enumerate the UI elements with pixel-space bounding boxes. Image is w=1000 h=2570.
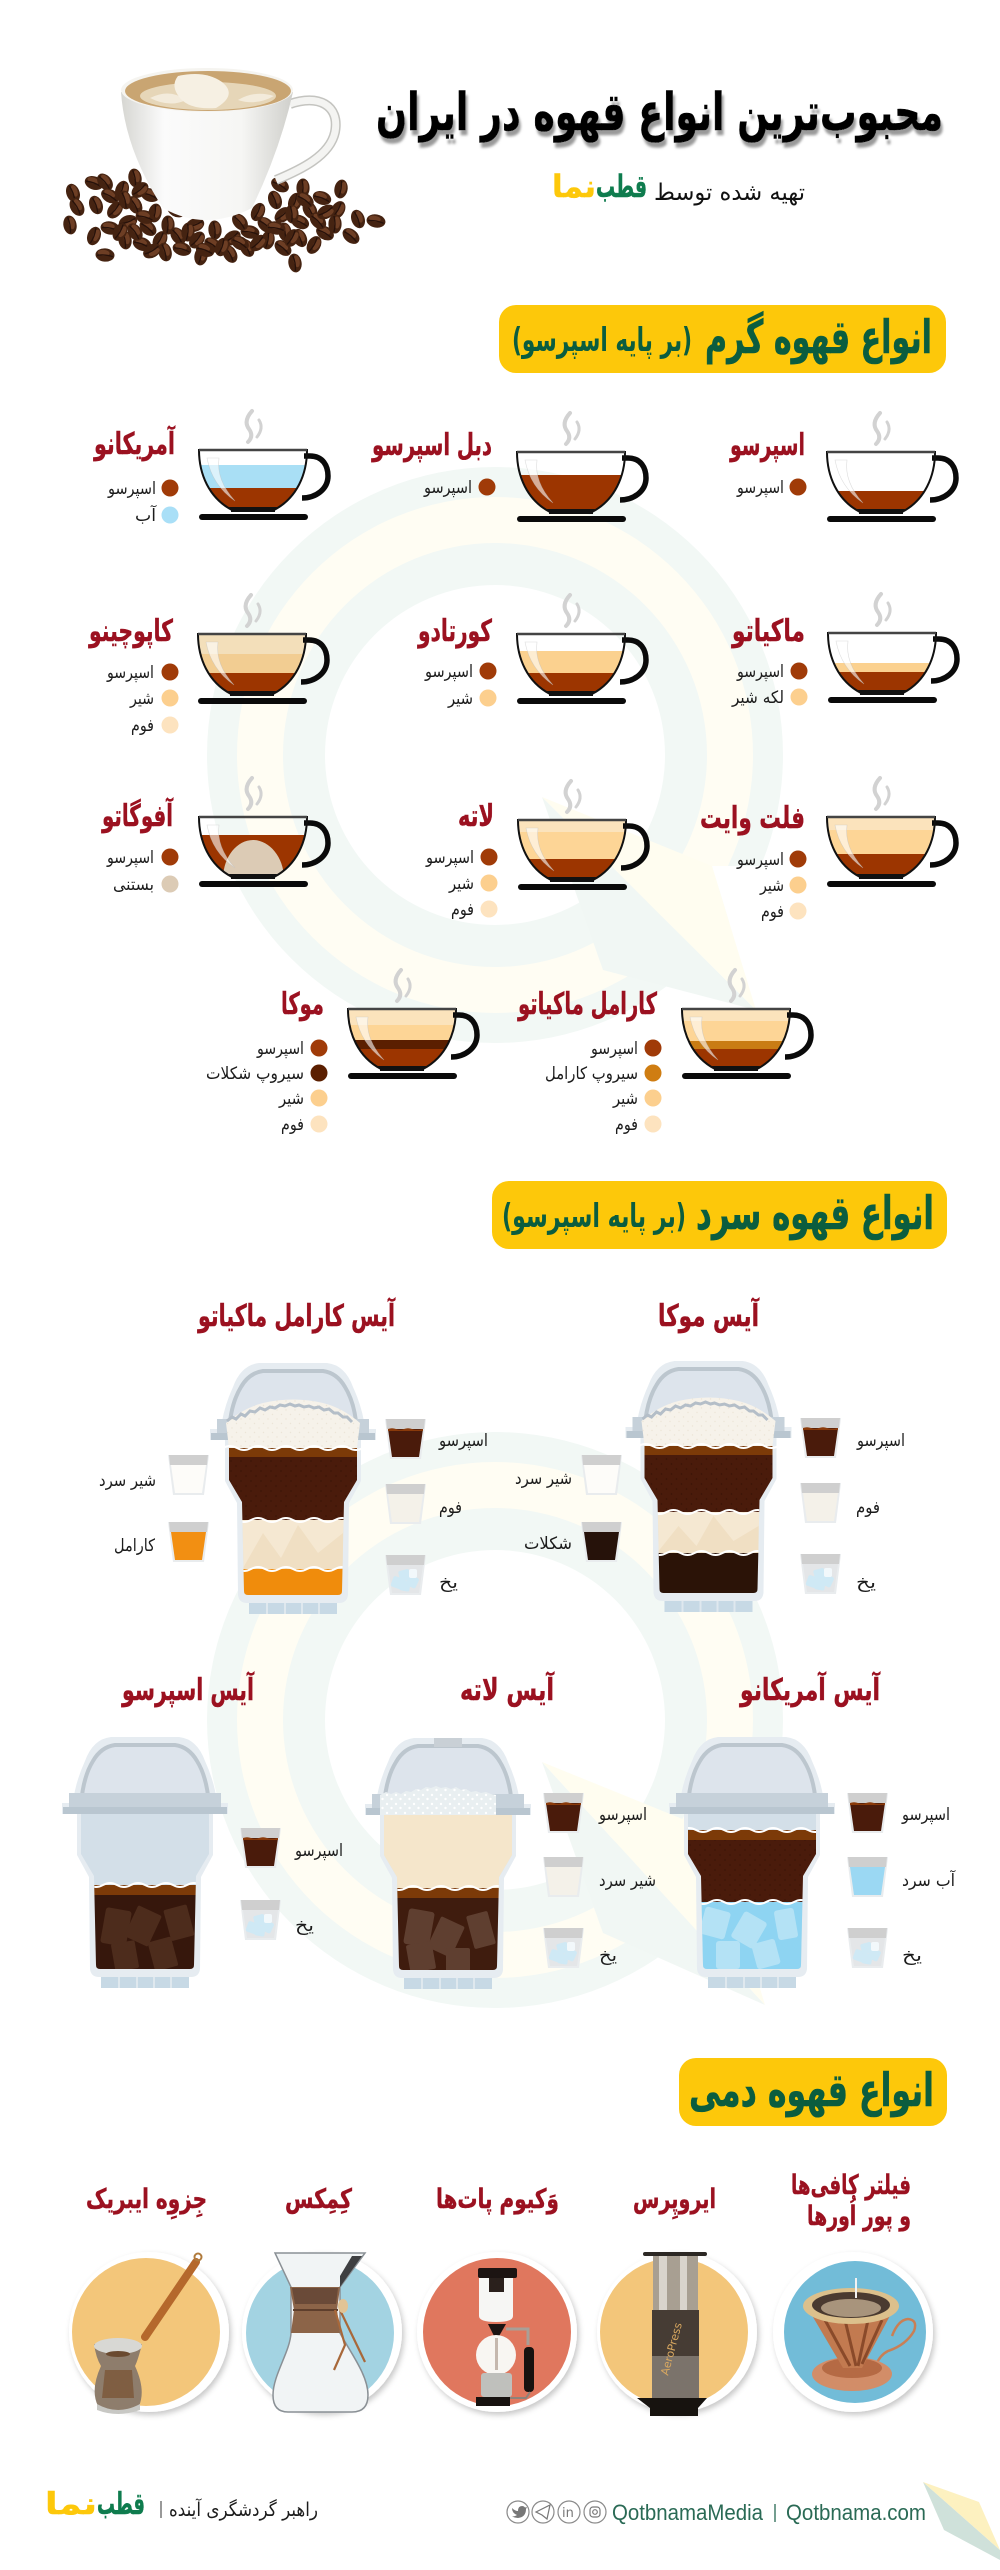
ingredients legend: شیر bbox=[612, 1089, 638, 1109]
name: وَکیوم پات‌ها bbox=[436, 2184, 559, 2215]
cup bbox=[518, 781, 647, 890]
name: آیس اسپرسو bbox=[121, 1671, 254, 1708]
section heading: cold coffee: (بر پایه اسپرسو) bbox=[502, 1196, 686, 1236]
mug handle bbox=[276, 100, 336, 180]
glass bbox=[210, 1363, 376, 1614]
cup bbox=[828, 594, 957, 703]
ingredients legend: شیر سرد bbox=[515, 1469, 572, 1489]
iced drink: iced caramel macchiato bbox=[99, 1297, 488, 1614]
name: دبل اسپرسو bbox=[371, 428, 492, 463]
brand logo: قطب bbox=[97, 2487, 145, 2522]
iced drink: iced latte bbox=[365, 1671, 656, 1989]
coffee beans bbox=[62, 167, 387, 274]
cup bbox=[199, 778, 328, 887]
ingredients legend: اسپرسو bbox=[590, 1039, 638, 1059]
ingredients legend: بستنی bbox=[113, 875, 154, 895]
ingredients legend bbox=[424, 662, 496, 709]
name: اسپرسو bbox=[729, 428, 805, 463]
latte art bbox=[140, 74, 276, 110]
brand logo: نما bbox=[45, 2487, 97, 2522]
ingredients legend bbox=[99, 1419, 488, 1595]
drink: cappuccino bbox=[88, 595, 327, 736]
background watermark: upper compass logo bbox=[207, 467, 1000, 1060]
method: aeropress bbox=[597, 2184, 757, 2416]
section heading: brewed coffee bbox=[679, 2058, 947, 2126]
name: آیس کارامل ماکیاتو bbox=[197, 1297, 395, 1334]
ingredients legend: آب bbox=[135, 504, 157, 526]
glass bbox=[62, 1737, 228, 1988]
iced drink: iced espresso bbox=[62, 1671, 343, 1988]
glass bbox=[626, 1361, 792, 1612]
ingredients legend: فوم bbox=[281, 1115, 304, 1135]
ingredients legend bbox=[425, 848, 498, 920]
ingredients legend: یخ bbox=[902, 1946, 922, 1966]
method: chemex bbox=[242, 2184, 402, 2412]
section heading: cold coffee bbox=[492, 1181, 947, 1249]
cup bbox=[517, 595, 646, 704]
drink: affogato bbox=[101, 778, 328, 895]
brand logo: yellow part: نما bbox=[552, 169, 596, 205]
mug rim bbox=[121, 68, 293, 112]
name: جِزوِه ایبریک bbox=[86, 2184, 207, 2219]
iced drink: iced mocha bbox=[515, 1297, 905, 1612]
name: آفوگاتو bbox=[101, 797, 173, 834]
drink: macchiato bbox=[731, 594, 957, 708]
drink: cortado bbox=[417, 595, 646, 709]
ingredients legend: شیر سرد bbox=[99, 1471, 156, 1491]
ingredients legend: کارامل bbox=[114, 1536, 156, 1556]
method: cezve bbox=[69, 2184, 229, 2414]
ingredients legend: شیر bbox=[278, 1089, 304, 1109]
ingredients legend: فوم bbox=[856, 1498, 880, 1518]
iced drink: iced americano bbox=[669, 1671, 956, 1988]
cup bbox=[517, 413, 646, 522]
name: کورتادو bbox=[417, 614, 492, 649]
cup bbox=[682, 970, 811, 1079]
hero: coffee mug with beans bbox=[62, 68, 387, 274]
ingredients legend: یخ bbox=[295, 1916, 314, 1936]
coffee surface bbox=[125, 71, 291, 111]
ingredients legend: فوم bbox=[439, 1498, 462, 1518]
divider bbox=[774, 2504, 776, 2522]
glass bbox=[669, 1737, 835, 1988]
ingredients legend: فوم bbox=[615, 1115, 638, 1135]
cup bbox=[827, 413, 956, 522]
method: filter and pour-over bbox=[773, 2170, 933, 2412]
drink: flat white bbox=[700, 778, 956, 922]
circle bbox=[417, 2252, 577, 2412]
ingredients legend bbox=[206, 1039, 328, 1135]
name: ماکیاتو bbox=[731, 614, 805, 649]
ingredients legend bbox=[543, 1793, 656, 1968]
drink: double espresso bbox=[371, 413, 646, 522]
cup bbox=[827, 778, 956, 887]
icon: cezve pot bbox=[94, 2254, 202, 2414]
handle: QotbnamaMedia bbox=[612, 2500, 764, 2525]
ingredients legend bbox=[731, 662, 808, 708]
brand logo bbox=[45, 2487, 145, 2522]
name: آیس لاته bbox=[460, 1671, 555, 1708]
ingredients legend: اسپرسو bbox=[423, 478, 472, 498]
method: vacuum pot bbox=[417, 2184, 577, 2412]
glass bbox=[365, 1738, 531, 1989]
name: فیلتر کافی‌ها bbox=[791, 2170, 911, 2201]
tagline: راهبر گردشگری آینده bbox=[169, 2497, 318, 2521]
ingredients legend bbox=[106, 663, 178, 736]
ingredients legend: لکه شیر bbox=[731, 688, 784, 708]
section heading: hot coffee bbox=[499, 305, 946, 373]
footer bbox=[45, 2482, 1000, 2560]
ingredients legend: فوم bbox=[451, 900, 474, 920]
ingredients legend: شیر bbox=[447, 689, 473, 709]
ingredients legend: شیر bbox=[448, 874, 474, 894]
social icons: in bbox=[562, 2506, 574, 2521]
brand logo: green part: قطب bbox=[596, 169, 647, 205]
icon: aeropress: AeroPress bbox=[658, 2321, 685, 2377]
cup bbox=[199, 411, 328, 520]
circle bbox=[242, 2252, 402, 2412]
ingredients legend bbox=[107, 479, 178, 526]
ingredients legend: شکلات bbox=[524, 1534, 572, 1554]
ingredients legend: فوم bbox=[131, 716, 154, 736]
circle bbox=[69, 2252, 229, 2412]
icon: siphon bbox=[476, 2268, 534, 2406]
ingredients legend bbox=[847, 1793, 956, 1968]
name bbox=[791, 2170, 911, 2232]
name: فلت وایت bbox=[700, 801, 805, 836]
drink: latte bbox=[425, 781, 647, 920]
ingredients legend bbox=[240, 1828, 343, 1940]
subtitle text: تهیه شده توسط bbox=[654, 180, 805, 206]
ingredients legend: سیروپ کارامل bbox=[545, 1064, 638, 1084]
ingredients legend: اسپرسو bbox=[294, 1841, 343, 1861]
ingredients legend: اسپرسو bbox=[107, 479, 156, 499]
mug body bbox=[121, 92, 293, 220]
drink: espresso bbox=[729, 413, 956, 522]
name: آیس موکا bbox=[658, 1297, 760, 1334]
ingredients legend: یخ bbox=[439, 1573, 458, 1593]
ingredients legend: شیر bbox=[129, 689, 154, 709]
ingredients legend: اسپرسو bbox=[598, 1805, 647, 1825]
corner compass logo bbox=[923, 2482, 1000, 2560]
circle bbox=[597, 2252, 757, 2412]
ingredients legend: یخ bbox=[856, 1573, 876, 1593]
ingredients legend: اسپرسو bbox=[106, 848, 154, 868]
drink: americano bbox=[93, 411, 328, 526]
ingredients legend: اسپرسو bbox=[736, 850, 784, 870]
subtitle with brand logo bbox=[552, 169, 805, 206]
name: لاته bbox=[458, 799, 494, 834]
ingredients legend: اسپرسو bbox=[736, 478, 784, 498]
ingredients legend: اسپرسو bbox=[256, 1039, 304, 1059]
name: کارامل ماکیاتو bbox=[517, 987, 657, 1022]
social icons bbox=[507, 2501, 606, 2523]
circle bbox=[773, 2252, 933, 2412]
section heading: hot coffee: (بر پایه اسپرسو) bbox=[512, 320, 692, 360]
ingredients legend: اسپرسو bbox=[425, 848, 474, 868]
ingredients legend: اسپرسو bbox=[424, 662, 473, 682]
cup bbox=[348, 970, 477, 1079]
ingredients legend: اسپرسو bbox=[856, 1431, 905, 1451]
ingredients legend bbox=[515, 1418, 905, 1594]
background watermark: lower compass logo bbox=[207, 1432, 1000, 2025]
ingredients legend: شیر bbox=[759, 876, 784, 896]
icon: chemex flask bbox=[273, 2253, 368, 2412]
ingredients legend: اسپرسو bbox=[438, 1431, 488, 1451]
ingredients legend: شیر سرد bbox=[599, 1871, 656, 1891]
ingredients legend: اسپرسو bbox=[736, 662, 784, 682]
ingredients legend bbox=[736, 850, 806, 922]
icon: aeropress bbox=[637, 2252, 707, 2416]
name: کاپوچینو bbox=[88, 614, 173, 649]
cup bbox=[198, 595, 327, 704]
ingredients legend bbox=[545, 1039, 662, 1135]
name: آمریکانو bbox=[93, 425, 175, 462]
name: موکا bbox=[281, 987, 324, 1022]
ingredients legend: اسپرسو bbox=[106, 663, 154, 683]
ingredients legend bbox=[106, 848, 178, 895]
ingredients legend: سیروپ شکلات bbox=[206, 1064, 304, 1084]
ingredients legend: فوم bbox=[761, 902, 784, 922]
name: کِمِکس bbox=[285, 2184, 352, 2215]
icon: copper dripper bbox=[803, 2278, 915, 2391]
website: Qotbnama.com bbox=[786, 2500, 926, 2525]
drink: caramel macchiato bbox=[517, 970, 811, 1135]
ingredients legend: یخ bbox=[599, 1946, 617, 1966]
name: آیس آمریکانو bbox=[739, 1671, 881, 1708]
name: ایروپِرس bbox=[633, 2184, 716, 2219]
drink: mocha bbox=[206, 970, 477, 1135]
ingredients legend: اسپرسو bbox=[901, 1805, 950, 1825]
ingredients legend: آب سرد bbox=[902, 1869, 956, 1891]
name: و پور اُورها bbox=[807, 2195, 911, 2232]
